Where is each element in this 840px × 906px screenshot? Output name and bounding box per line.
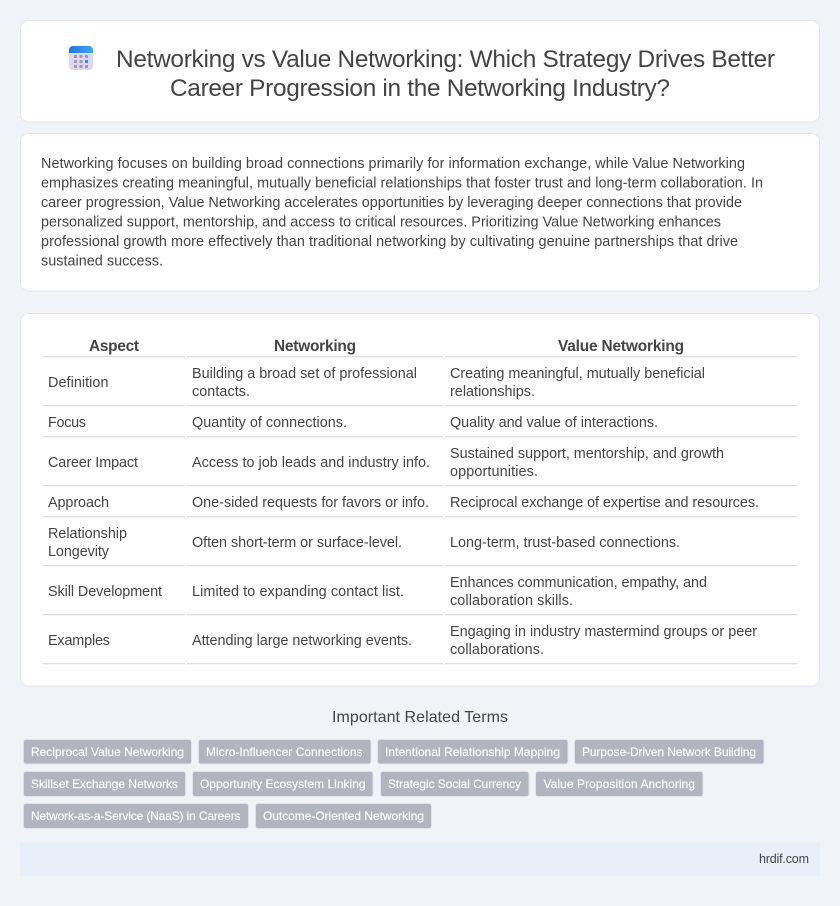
row: examples: Examples [48,633,110,649]
tag [198,740,371,764]
summary paragraph: emphasizes creating meaningful, mutually beneficial relationships that foster trust and long-term collaboration. In [41,176,763,192]
tag [536,772,703,796]
row: career impact: Access to job leads and industry info. [192,455,430,471]
row: examples: collaborations. [450,642,544,658]
tag: Network-as-a-Service (NaaS) in Careers [31,809,241,823]
row: focus: Quality and value of interactions. [450,415,658,431]
row: definition: contacts. [192,384,250,400]
summary paragraph [41,156,763,270]
tag [378,740,568,764]
tag [24,804,248,828]
row: examples [48,624,757,658]
tag [24,772,186,796]
tag: Strategic Social Currency [388,777,521,791]
tag: Outcome-Oriented Networking [263,809,424,823]
row: definition: Creating meaningful, mutually beneficial [450,366,705,382]
footer bar [20,842,820,876]
row: relationship longevity: Relationship [48,526,127,542]
summary paragraph: professional growth more effectively than traditional networking by cultivating genuine partnerships that drive [41,234,738,250]
tag: Skillset Exchange Networks [31,777,178,791]
tag: Reciprocal Value Networking [31,745,184,759]
tag: Micro-Influencer Connections [206,745,363,759]
row: definition: Definition [48,375,108,391]
tag: Opportunity Ecosystem Linking [200,777,366,791]
table header: Value Networking [558,338,684,355]
title: Networking vs Value Networking: Which Strategy Drives Better [116,46,775,73]
tag [24,740,192,764]
row: examples: Engaging in industry mastermind groups or peer [450,624,757,640]
tag: Purpose-Driven Network Building [582,745,756,759]
row: focus [48,415,658,431]
title [116,46,775,102]
tag: Value Proposition Anchoring [544,777,695,791]
row: career impact [48,446,724,480]
title: Career Progression in the Networking Industry? [170,75,670,102]
row: approach: Approach [48,495,109,511]
row: definition: Building a broad set of professional [192,366,417,382]
row: definition: relationships. [450,384,535,400]
tag [256,804,432,828]
row: career impact: opportunities. [450,464,538,480]
row: skill development: collaboration skills. [450,593,573,609]
tag [574,740,764,764]
row: examples: Attending large networking events. [192,633,412,649]
summary paragraph: sustained success. [41,254,163,270]
tag [380,772,529,796]
row: relationship longevity: Often short-term or surface-level. [192,535,402,551]
row: relationship longevity [48,526,680,560]
tag: Intentional Relationship Mapping [385,745,560,759]
row: approach: One-sided requests for favors or info. [192,495,429,511]
table header: Aspect [89,338,139,355]
row: skill development: Skill Development [48,584,162,600]
row: focus: Quantity of connections. [192,415,347,431]
summary paragraph: career progression, Value Networking accelerates opportunities by leveraging deeper connections that provide [41,195,742,211]
row: skill development [48,575,707,609]
table header: Networking [274,338,356,355]
panel: comparison table [20,314,820,686]
summary paragraph: Networking focuses on building broad connections primarily for information exchange, while Value Networking [41,156,745,172]
row: approach: Reciprocal exchange of expertise and resources. [450,495,759,511]
panel: summary text [20,134,820,291]
tag [192,772,373,796]
heading: important related terms: Important Related Terms [332,709,508,726]
row: relationship longevity: Longevity [48,544,110,560]
tags: related terms [24,740,764,828]
icon: calendar [69,46,93,70]
row: definition [48,366,705,400]
row: focus: Focus [48,415,86,431]
row: career impact: Sustained support, mentorship, and growth [450,446,724,462]
row: skill development: Enhances communication, empathy, and [450,575,707,591]
summary paragraph: personalized support, mentorship, and access to critical resources. Prioritizing Value Networking enhances [41,214,721,230]
row: skill development: Limited to expanding contact list. [192,584,404,600]
footer source: hrdif.com [759,852,809,866]
row: career impact: Career Impact [48,455,138,471]
row: relationship longevity: Long-term, trust-based connections. [450,535,680,551]
table header [89,338,684,355]
row: approach [48,495,759,511]
panel: header [20,20,820,122]
